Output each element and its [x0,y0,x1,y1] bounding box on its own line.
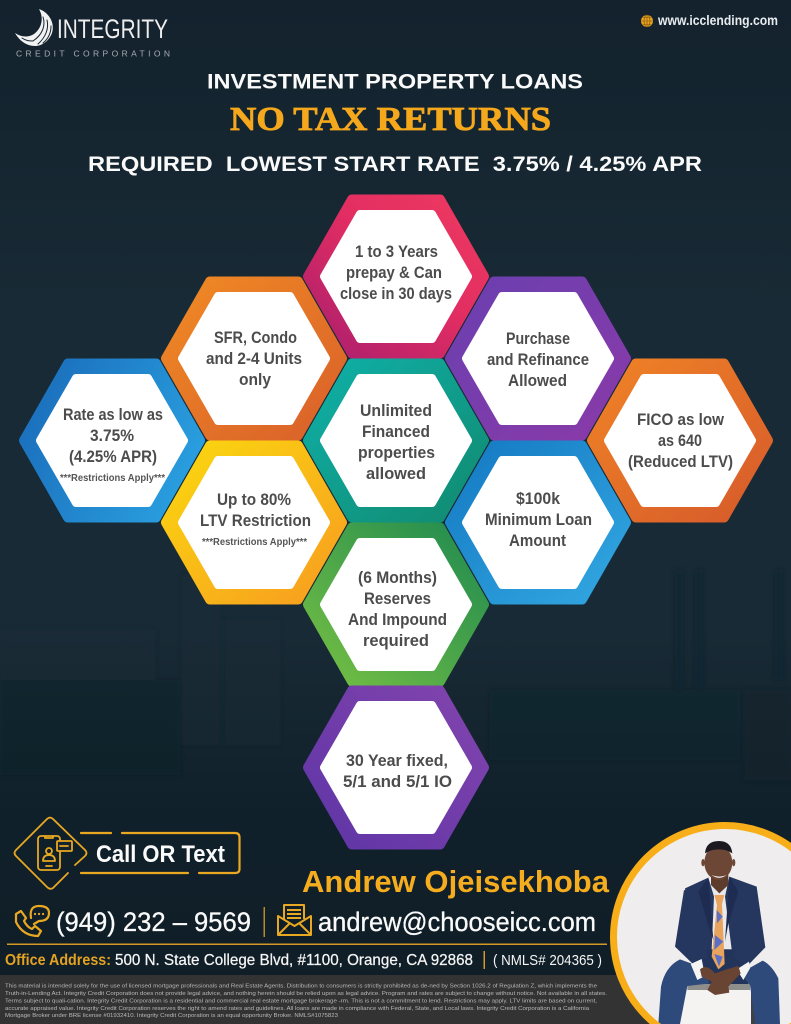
call or text badge [14,818,240,889]
title line 2: NO TAX RETURNS [230,101,551,138]
office address: ( NMLS# 204365 ) [493,952,602,969]
title line 1: INVESTMENT PROPERTY LOANS [207,70,583,94]
hexagon: rate: 3.75% [90,427,134,445]
hexagon: minimum loan: Minimum Loan [485,511,592,529]
website link: www.icclending.com [657,13,778,28]
hexagon: reserves: required [363,632,429,650]
jacket sleeves [675,890,695,964]
call or text badge: Call OR Text [96,841,225,868]
jacket torso [685,877,757,950]
hexagon: minimum loan: $100k [516,490,561,508]
trousers [658,959,710,1024]
office address: Office Address: [5,952,111,969]
hexagon: prepay: prepay & Can [346,264,442,282]
hexagon: FICO [592,364,768,518]
cuffs [691,959,705,980]
icon: globe [641,15,653,27]
hexagon: unlimited financed: properties [358,444,435,462]
hexagon: prepay [308,200,484,354]
hexagon: purchase and refinance: Purchase [506,330,570,348]
legal disclaimer: Mortgage Broker under BRE license #01932410. Integrity Credit Corporation is an equal opportunity Broker. NMLS#1075823 [5,1013,338,1019]
hexagon: FICO: (Reduced LTV) [628,453,733,471]
office address: 500 N. State College Blvd, #1100, Orange, CA 92868 [115,952,473,969]
hexagon: unlimited financed: Financed [362,423,430,441]
hexagon: reserves: (6 Months) [358,569,437,587]
hands [700,966,741,995]
hexagon: reserves [308,528,484,682]
agent name: Andrew Ojeisekhoba [302,864,610,899]
neck [711,875,728,893]
hexagon: FICO: FICO as low [637,411,724,429]
hexagon: LTV: ***Restrictions Apply*** [202,536,308,548]
icon: diamond with phone [14,818,86,889]
hexagon: minimum loan [450,446,626,600]
phone: (949) 232 – 9569 [56,907,251,937]
logo subtitle: CREDIT CORPORATION [16,48,170,58]
hexagon: LTV: LTV Restriction [200,512,311,530]
hexagon: rate: Rate as low as [63,406,163,424]
hexagon: LTV: Up to 80% [217,491,291,509]
hexagon: property types: only [239,371,272,389]
badge frame [81,833,240,873]
separator [264,907,265,937]
hexagon: property types [166,282,342,436]
hexagon: rate: ***Restrictions Apply*** [60,472,166,484]
hexagon: purchase and refinance: and Refinance [487,351,589,369]
legal disclaimer: Terms subject to quali-cation. Integrity Credit Corporation is a residential and commercial real estate mortgage brokerage -rm. This is not a commitment to lend. Restrictions may apply. LTV limits are based on current, [5,998,597,1004]
hexagon: rate [24,364,200,518]
hexagon: reserves: Reserves [364,590,431,608]
shirt [712,946,732,950]
hexagon: reserves: And Impound [348,611,447,629]
legal disclaimer: This material is intended solely for the use of licensed mortgage professionals and Real Estate Agents. Distribution to consumers is strictly prohibited as de-ned by Section 1026.2 of Regulation Z, which implements the [5,984,597,990]
heading [88,70,703,176]
legal disclaimer: accurate appraised value. Integrity Credit Corporation reserves the right to amend rates and guidelines. All loans are made in compliance with Federal, State, and Local laws. Integrity Credit Corporation is a California [5,1006,590,1012]
hexagon: purchase and refinance: Allowed [508,372,567,390]
hexagon: rate: (4.25% APR) [69,448,157,466]
address divider [7,944,607,945]
logo [15,9,170,58]
hexagon: FICO: as 640 [658,432,702,450]
hexagon: property types: SFR, Condo [214,329,297,347]
hexagon: loan terms: 5/1 and 5/1 IO [343,773,452,791]
legal disclaimer [0,975,791,1024]
hexagon: property types: and 2-4 Units [206,350,302,368]
waist [702,949,748,984]
tie [712,895,725,969]
hexagon: prepay: 1 to 3 Years [355,243,438,261]
hexagon: LTV [166,446,342,600]
head [704,849,732,880]
box seat [680,987,752,1024]
hexagon: loan terms [308,690,484,844]
icon: wing [15,9,53,46]
legal disclaimer: Truth-in-Lending Act. Integrity Credit Corporation does not provide legal advice, and nothing herein should be relied upon as legal advice. Program and rates are subject to change without notice. Not available in all states. [5,991,607,997]
title line 3: REQUIRED LOWEST START RATE 3.75% / 4.25% APR [88,152,703,176]
hexagon: prepay: close in 30 days [340,285,452,303]
hexagon: purchase and refinance [450,282,626,436]
hexagon: unlimited financed: allowed [366,465,426,483]
office address [5,951,602,969]
hexagon: loan terms: 30 Year fixed, [346,752,448,770]
agent portrait [614,826,791,1024]
logo wordmark: INTEGRITY [57,14,168,44]
email: andrew@chooseicc.com [318,907,596,937]
icon: phone [16,906,49,936]
icon: envelope [278,905,311,935]
hexagon: minimum loan: Amount [509,532,566,550]
hexagon: unlimited financed: Unlimited [360,402,432,420]
hexagon: unlimited financed [308,364,484,518]
